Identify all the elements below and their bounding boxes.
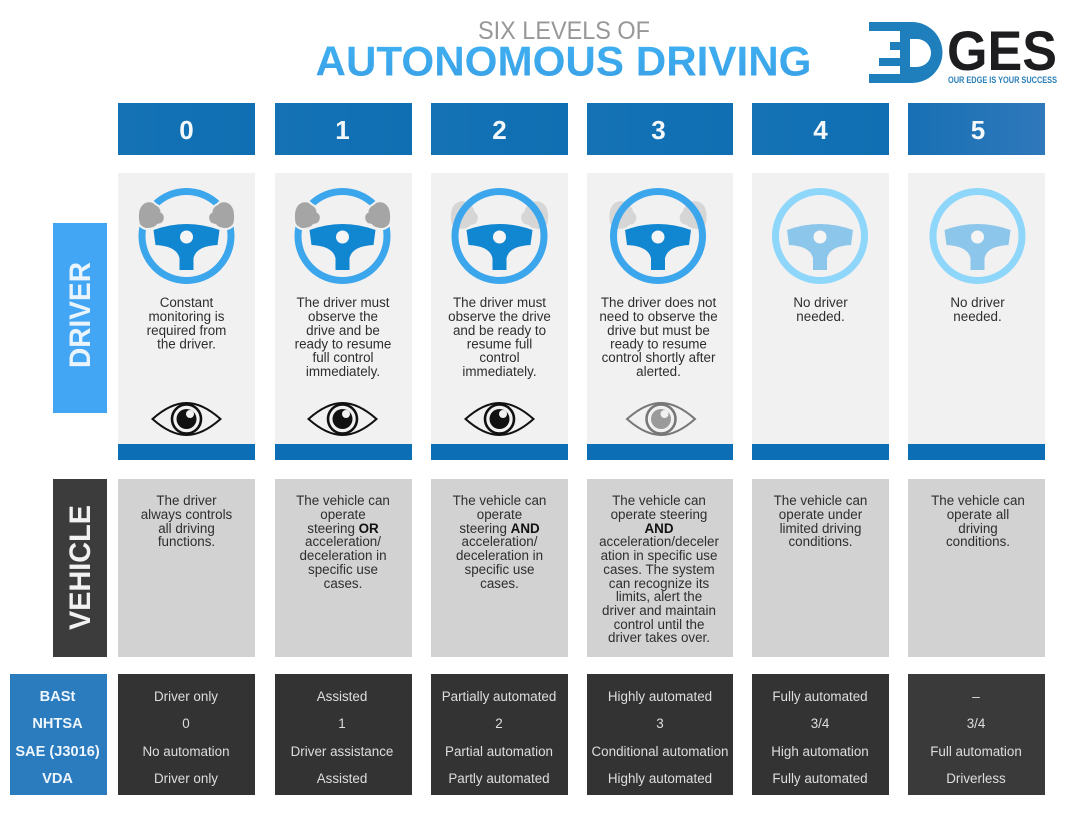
panel: vehicle level 2: The vehicle can (453, 493, 546, 508)
row label: vehicle (53, 479, 107, 657)
row label: driver: DRIVER (64, 262, 97, 368)
panel: standards labels: VDA (42, 771, 73, 787)
driver text level 5: needed. (953, 309, 1002, 324)
header level 3: 3 (651, 115, 666, 145)
panel: standards level 4: Fully automated (772, 771, 868, 786)
panel: standards level 0: No automation (142, 744, 230, 759)
icon: faded eye (627, 403, 695, 435)
header level 4 (752, 103, 889, 155)
driver text level 2: observe the drive (448, 309, 551, 324)
panel: standards labels: SAE (J3016) (15, 744, 100, 760)
panel: vehicle level 5: driving (958, 521, 998, 536)
driver text level 2: resume full (467, 336, 532, 352)
panel: vehicle level 1: deceleration in (299, 548, 387, 563)
panel: standards level 5: Driverless (946, 771, 1006, 786)
level headers (118, 103, 1045, 155)
panel: standards level 0: 0 (182, 716, 190, 731)
panel: vehicle level 3: The vehicle can (612, 493, 706, 508)
header level 2 (431, 103, 568, 155)
driver text level 0: monitoring is (149, 309, 225, 324)
logo wordmark: GES (947, 19, 1057, 82)
icon: eye (308, 403, 376, 435)
driver text level 1: immediately. (306, 364, 380, 379)
icon: faded steering wheel (776, 192, 864, 280)
driver text level 3 (599, 295, 718, 379)
panel: standards level 2: Partially automated (442, 689, 556, 704)
driver text level 3: alerted. (636, 364, 681, 379)
panel: vehicle level 4: operate under (779, 507, 863, 522)
panel: standards level 5: – (972, 689, 980, 704)
panel: standards level 3: Highly automated (608, 771, 712, 786)
panel: standards level 0 (118, 674, 255, 795)
panel: vehicle level 3: driver takes over. (608, 630, 710, 645)
driver text level 1: full control (312, 350, 374, 365)
icon: steering wheel with hands (294, 192, 391, 280)
icon: steering wheel with faded hands (451, 192, 548, 280)
logo mark (869, 22, 942, 83)
panel: driver level 3 (587, 173, 733, 460)
driver text level 0: Constant (160, 295, 214, 310)
driver text level 2: and be ready to (453, 323, 546, 338)
panel: standards level 0: Driver only (154, 689, 218, 704)
driver text level 0: required from (147, 323, 226, 338)
driver text level 5: No driver (950, 295, 1005, 310)
panel: standards labels: NHTSA (32, 716, 83, 732)
panel: standards level 4 (752, 674, 889, 795)
panel: vehicle level 0: always controls (141, 507, 233, 522)
panel: vehicle level 2: cases. (480, 576, 519, 591)
panel: vehicle level 4: limited driving (780, 521, 861, 536)
panel: standards level 3: 3 (656, 716, 664, 731)
driver text level 0 (147, 295, 226, 352)
panel: vehicle level 0 (118, 479, 255, 657)
panel: vehicle level 0: all driving (158, 521, 215, 536)
panel: standards level 1: 1 (338, 716, 346, 731)
panel: vehicle level 3: AND (644, 521, 674, 536)
panel: vehicle level 5 (908, 479, 1045, 657)
panel: vehicle level 1: steering OR (307, 521, 379, 536)
driver text level 1: drive and be (306, 323, 380, 338)
title line: six levels of: SIX LEVELS OF (478, 17, 650, 45)
panel: vehicle level 2 (431, 479, 568, 657)
panel: standards level 3 (587, 674, 733, 795)
panel: vehicle level 2: deceleration in (456, 548, 543, 563)
panel: vehicle level 3: ation in specific use (601, 548, 717, 563)
panel: standards level 1 (275, 674, 412, 795)
panel: vehicle level 2: operate (477, 507, 522, 522)
panel: standards level 3: Conditional automation (592, 744, 728, 759)
panel: standards level 0: Driver only (154, 771, 218, 786)
panel: vehicle level 1: acceleration/ (305, 534, 381, 549)
driver text level 2: control (479, 350, 520, 365)
header level 3 (587, 103, 733, 155)
panel: standards level 5 (908, 674, 1045, 795)
driver text level 2: immediately. (462, 364, 537, 379)
driver text level 3: drive but must be (607, 323, 710, 338)
icon: steering wheel with faded hands (609, 192, 707, 280)
driver text level 2 (448, 295, 551, 379)
driver text level 3: need to observe the (599, 309, 718, 324)
header level 4: 4 (813, 115, 828, 145)
panel: vehicle level 0: functions. (158, 534, 215, 549)
panel: driver level 1 (275, 173, 412, 460)
row label: vehicle: VEHICLE (64, 505, 97, 630)
panel: standards labels: BASt (40, 689, 75, 705)
driver text level 1 (295, 295, 391, 379)
panel: vehicle level 4 (752, 479, 889, 657)
icon: steering wheel with hands (138, 192, 235, 280)
header level 1: 1 (335, 115, 350, 145)
panel: standards level 2: 2 (495, 716, 503, 731)
panel: standards level 3: Highly automated (608, 689, 712, 704)
panel: standards level 5: 3/4 (967, 716, 986, 731)
icon: eye (466, 403, 534, 435)
panel: vehicle level 4: The vehicle can (774, 493, 867, 508)
panel: standards level 2: Partial automation (445, 744, 553, 759)
panel: standards level 4: Fully automated (772, 689, 868, 704)
panel: vehicle level 1 (275, 479, 412, 657)
driver text level 4: No driver (793, 295, 848, 310)
header level 1 (275, 103, 412, 155)
panel: vehicle level 5: conditions. (946, 534, 1010, 549)
panel: vehicle level 3: cases. The system (603, 562, 715, 577)
driver text level 4 (793, 295, 848, 324)
panel: vehicle level 1: specific use (308, 562, 378, 577)
panel: standards level 1: Driver assistance (291, 744, 393, 759)
panel: vehicle level 2: specific use (465, 562, 534, 577)
driver text level 3: The driver does not (601, 295, 716, 310)
panel: vehicle level 3 (587, 479, 733, 657)
driver text level 4: needed. (796, 309, 845, 324)
driver text level 1: The driver must (296, 295, 390, 310)
panel: vehicle level 1: cases. (324, 576, 362, 591)
panel: vehicle level 3: can recognize its (609, 576, 710, 591)
panel: vehicle level 3: operate steering (611, 507, 707, 522)
panel: vehicle level 2: steering AND (459, 521, 540, 536)
icon: faded steering wheel (933, 192, 1022, 280)
row label: driver (53, 223, 107, 413)
driver text level 1: ready to resume (295, 336, 391, 352)
panel: vehicle level 3: driver and maintain (602, 603, 716, 618)
panel: standards level 1: Assisted (317, 771, 367, 786)
header level 0: 0 (179, 115, 194, 145)
title line: autonomous driving: AUTONOMOUS DRIVING (316, 38, 812, 84)
panel: vehicle level 3: limits, alert the (616, 589, 702, 604)
panel: driver level 2 (431, 173, 568, 460)
panel: standards level 4: High automation (771, 744, 869, 759)
panel: driver level 5 (908, 173, 1045, 460)
icon: eye (152, 403, 220, 435)
panel: standards labels (10, 674, 107, 795)
panel: vehicle level 3: acceleration/deceler (599, 534, 719, 549)
panel: vehicle level 0: The driver (156, 493, 217, 508)
panel: standards level 2: Partly automated (448, 771, 550, 786)
title (316, 17, 812, 84)
driver text level 3: control shortly after (602, 350, 716, 365)
panel: standards level 4: 3/4 (811, 716, 830, 731)
panel: standards level 5: Full automation (930, 744, 1022, 759)
header level 0 (118, 103, 255, 155)
driver text level 5 (950, 295, 1005, 324)
panel: standards level 2 (431, 674, 568, 795)
panel: vehicle level 5: operate all (947, 507, 1009, 522)
driver text level 1: observe the (308, 309, 378, 324)
panel: vehicle level 3: control until the (614, 617, 704, 632)
header level 5: 5 (971, 115, 985, 145)
panel: driver level 4 (752, 173, 889, 460)
logo: EDGES (869, 19, 1057, 86)
panel: driver level 0 (118, 173, 255, 460)
driver text level 2: The driver must (453, 295, 546, 310)
panel: vehicle level 4: conditions. (788, 534, 853, 549)
header level 2: 2 (492, 115, 507, 145)
panel: vehicle level 1: operate (320, 507, 366, 522)
panel: standards level 1: Assisted (317, 689, 367, 704)
panel: vehicle level 2: acceleration/ (462, 534, 538, 549)
panel: vehicle level 1: The vehicle can (296, 493, 390, 508)
driver text level 0: the driver. (157, 336, 216, 352)
panel: vehicle level 5: The vehicle can (931, 493, 1025, 508)
header level 5 (908, 103, 1045, 155)
driver text level 3: ready to resume (610, 336, 707, 352)
